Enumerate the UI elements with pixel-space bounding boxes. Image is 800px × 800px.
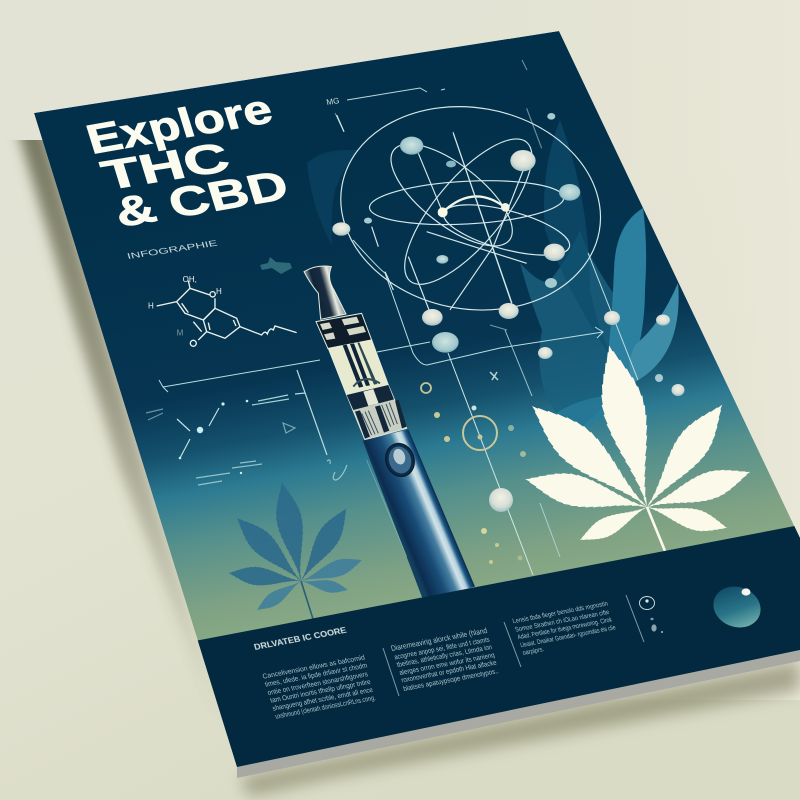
footer column 3: oarpiprs. (522, 646, 545, 657)
footer column 3: Somoe Stratheri ch iOLao nlarean cifte (514, 609, 611, 634)
molecule diagram: M (177, 328, 183, 337)
footer column 1: uxshmund (clentah doniossLcnRLns.cong. (275, 695, 377, 721)
small schematic marks (146, 395, 347, 485)
brochure bottom shadow (240, 660, 800, 796)
title: & CBD (109, 162, 294, 236)
molecule diagram: H (216, 287, 222, 296)
outline accent (367, 460, 407, 557)
top label (326, 88, 445, 107)
footer sphere (714, 586, 761, 628)
footer column 1: times, ufede. ia fipde drliavir st chodm (264, 662, 368, 689)
footer heading: DRLVATEB IC COORE (253, 626, 348, 652)
molecule diagram: OH, (183, 275, 197, 284)
footer column 2: tbeitiras, athletically crias, Ltimda ion (396, 644, 493, 669)
footer column 1: ontie on troverfteen stonarshfigovers (267, 671, 369, 697)
battery body (363, 429, 475, 601)
footer column 1 (262, 654, 377, 721)
footer column 1: shangueng afhet scrble, emdt all ence (272, 687, 374, 713)
large cream cannabis leaf (519, 341, 755, 551)
title: THC (96, 134, 235, 199)
glass tank (328, 340, 388, 395)
footer column 1: tam Ountri inortis tfhellp ufingpr tntire (270, 679, 372, 705)
upper collar (316, 313, 372, 349)
top label: MG (326, 96, 340, 107)
footer column 2: blatises apatuypsope dmenotypos.. (403, 668, 500, 693)
footer column 2: alerges orron eme wofur its nanienq (399, 652, 496, 677)
molecule diagram (148, 275, 297, 346)
brochure page edge (237, 650, 800, 778)
brochure left shadow (12, 140, 198, 669)
title: Explore (81, 86, 278, 163)
small blue cannabis leaf (227, 479, 365, 619)
footer column 2: roxonoverthat or epdoth Hlat alfacke (401, 660, 498, 684)
footer column 3: Lensis tbda fleger benolo dds mgnostin (512, 600, 609, 625)
vape pen (304, 266, 475, 601)
footer column 1: Cancelivension ellows as bafcomid (262, 654, 366, 681)
footer column 3 (512, 600, 617, 657)
inner orbits (337, 108, 574, 317)
atom diagram (332, 106, 602, 358)
title (86, 102, 286, 226)
subtitle: INFOGRAPHIE (126, 239, 219, 261)
background leaves (307, 120, 679, 435)
footer band (195, 525, 800, 780)
power button (385, 442, 415, 478)
lower metal collar (347, 385, 407, 440)
molecule diagram: H (148, 302, 154, 311)
footer column 3: Lleaist. Dnaikar Goendan- rgoumdas eis clie (520, 624, 617, 649)
floating spheres (489, 278, 684, 512)
outer orbit (340, 106, 602, 311)
footer column 2: acogrree anpop sei, flitfe und t ctamts (394, 637, 491, 661)
faint arrow icon (260, 257, 292, 274)
construction lines (159, 60, 638, 575)
footer column 2: Diaremeavirig alorck while (hland (390, 626, 488, 653)
electrons (332, 113, 580, 359)
mouthpiece (304, 266, 346, 319)
gold ring and dots (421, 372, 526, 564)
footer small icons (640, 596, 663, 633)
footer column 3: Adad. Pertilate for tlvega moreworing. Cirok (517, 616, 613, 641)
footer column 2 (390, 626, 500, 693)
